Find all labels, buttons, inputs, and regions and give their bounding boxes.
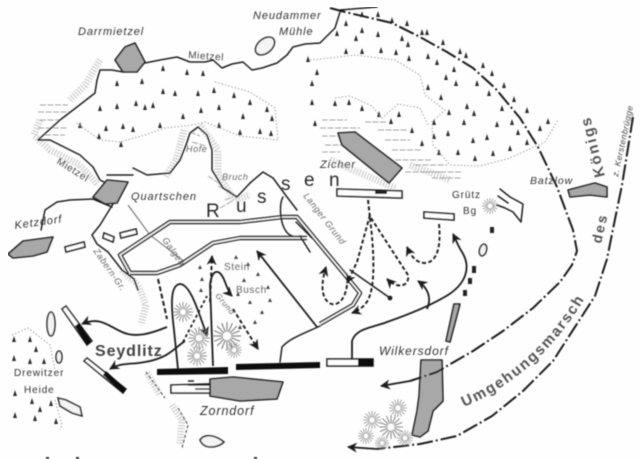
place label: Bg: Bg <box>463 206 477 217</box>
forest: tree symbols <box>12 11 550 424</box>
terrain label: Hofe: Hofe <box>186 144 207 154</box>
village: Ketzdorf <box>8 237 53 258</box>
place label: Zorndorf: Zorndorf <box>199 404 255 418</box>
place label: Quartschen: Quartschen <box>131 191 197 203</box>
dark marks in marsh strip <box>146 372 188 448</box>
march label: des: des <box>588 212 611 245</box>
arrow: right wing branch <box>418 281 429 309</box>
army label: Russen: e <box>304 170 315 191</box>
army label: Russen: s <box>257 187 266 208</box>
place label: Grutz Bg: Grütz <box>452 190 481 201</box>
arrow: march head to Wilkersdorf <box>381 381 410 386</box>
black bar: Prussian left <box>157 367 228 375</box>
unit bar: Seydlitz upper <box>62 306 92 345</box>
dark stream in Zabern-Grund <box>122 270 138 290</box>
bush: big Wilkersdorf wood <box>358 399 413 450</box>
army label: Seydlitz: Seydlitz <box>95 343 163 360</box>
edge marks at bottom <box>46 457 257 459</box>
unit bar: Seydlitz lower <box>84 358 126 393</box>
terrain label: Langer Grund: Langer Grund <box>301 191 348 247</box>
place label: Batzlow: Batzlow <box>530 175 574 187</box>
line: centre bar to road <box>280 326 320 362</box>
lake: by Zicher road <box>478 243 488 257</box>
bar: Russian small <box>424 212 454 220</box>
terrain label: Busch: Busch <box>236 285 267 296</box>
lake: Grutz <box>497 189 523 222</box>
lake: Heide small <box>56 351 62 363</box>
march route second column <box>377 117 633 449</box>
dot end marker <box>388 296 392 300</box>
terrain label: Bruch: Bruch <box>222 172 249 182</box>
place label: Drewitzer: Drewitzer <box>14 368 64 379</box>
terrain label: Galgen-Grund: Galgen <box>160 235 187 268</box>
wood markers: Steinbusch triangles <box>198 255 272 329</box>
black bar: Prussian centre <box>236 362 320 370</box>
arrow: dashed Zicher to road <box>352 218 373 313</box>
bar: Russian top mark <box>375 191 387 194</box>
army label: Russen: s <box>281 174 290 195</box>
place label: Wilkersdorf: Wilkersdorf <box>379 344 450 358</box>
arrow: centre up <box>210 272 232 366</box>
dashed line to Seydlitz <box>158 279 167 319</box>
march label: Konigs: Königs <box>577 114 609 179</box>
bushes: Steinbusch wood <box>173 302 242 366</box>
lake: Heide south <box>58 398 82 416</box>
arrow: left loop <box>172 284 207 369</box>
road label: Kerstenbrugge: z. Kerstenbrügge <box>610 104 635 178</box>
arrow: second column head <box>348 447 377 449</box>
junction circle on road <box>280 197 312 252</box>
marsh near Zicher <box>38 105 463 208</box>
bars: Russian west <box>103 229 137 242</box>
lake: Neudamm <box>252 34 278 58</box>
arrow: right wing main <box>352 234 467 359</box>
bar: Zorndorf front <box>171 384 210 393</box>
arrow: right dashed <box>407 224 440 263</box>
arrow: centre dashed up <box>210 256 212 302</box>
lake: south of Zorndorf <box>200 436 224 447</box>
lake: Heide long <box>47 312 55 336</box>
arrow: Seydlitz lower attack <box>110 341 185 369</box>
bar: Ketzdorf small <box>65 242 85 252</box>
village: Darrmietzel <box>115 43 145 72</box>
bar: Russian top <box>337 189 402 198</box>
river label: Mietzel top: Mietzel <box>188 50 224 63</box>
road: upper double line <box>120 217 360 324</box>
army label: Russen: R <box>206 201 220 222</box>
army label: Russen: n <box>329 170 340 191</box>
heavy dots column <box>463 227 494 296</box>
arrow: dashed right down <box>233 309 258 349</box>
terrain label: Stein: Stein <box>224 262 250 273</box>
arrow: Seydlitz upper attack <box>82 321 167 335</box>
arrow: long advance <box>257 251 317 327</box>
arrow: small loop <box>322 267 347 304</box>
marsh beside Zabern-Grund <box>122 270 146 325</box>
path from Quartschen south-east <box>128 205 185 262</box>
stream and Bruch <box>107 127 297 210</box>
river to Ketzdorf <box>41 199 112 230</box>
forest edge: dotted boundaries <box>12 55 558 430</box>
village: Wilkersdorf <box>412 360 443 437</box>
terrain label: Zabern-Grund: Zabern-Gr. <box>91 246 128 293</box>
river Mietzel <box>38 7 377 184</box>
line: dashed to top bar <box>368 200 370 218</box>
Prussian royal march route <box>330 8 577 381</box>
burst: Grutz hill <box>482 198 498 214</box>
village: Batzlow <box>568 183 607 197</box>
village: Quartschen <box>93 180 128 204</box>
march label: Umgehungsmarsch: Umgehungsmarsch <box>460 296 584 406</box>
dotted diagonal <box>183 296 207 342</box>
place label: Zicher: Zicher <box>319 159 356 171</box>
place label: Neudammer Muhle: Neudammer <box>253 10 322 22</box>
bar: Zorndorf front detail <box>188 381 210 389</box>
place label: Heide: Heide <box>24 385 55 396</box>
arrow: dashed to east <box>371 218 408 286</box>
bar: Prussian right black end <box>358 359 373 366</box>
river label: Mietzel west: Mietzel <box>54 156 91 185</box>
village: Zicher <box>338 132 402 183</box>
stream to Quartschen <box>92 204 122 270</box>
line with dot end <box>350 270 390 298</box>
place label: Ketzdorf: Ketzdorf <box>14 213 63 232</box>
place label: Darrmietzel: Darrmietzel <box>78 26 144 38</box>
bar: Prussian right <box>327 359 373 366</box>
terrain label: Grund: Grund <box>213 292 237 317</box>
arrow: dashed Zicher split left <box>347 215 370 283</box>
marsh strip south-west of Zorndorf <box>147 373 182 445</box>
village: Zorndorf <box>210 377 283 401</box>
unit bar: Seydlitz lower black end <box>103 371 126 393</box>
army label: Russen: u <box>236 196 247 217</box>
place label: Muhle: Mühle <box>279 26 313 38</box>
narrow settlement north of Wilkersdorf <box>446 304 460 342</box>
marsh haze along river banks <box>34 60 450 200</box>
unit bar black end <box>75 323 91 345</box>
